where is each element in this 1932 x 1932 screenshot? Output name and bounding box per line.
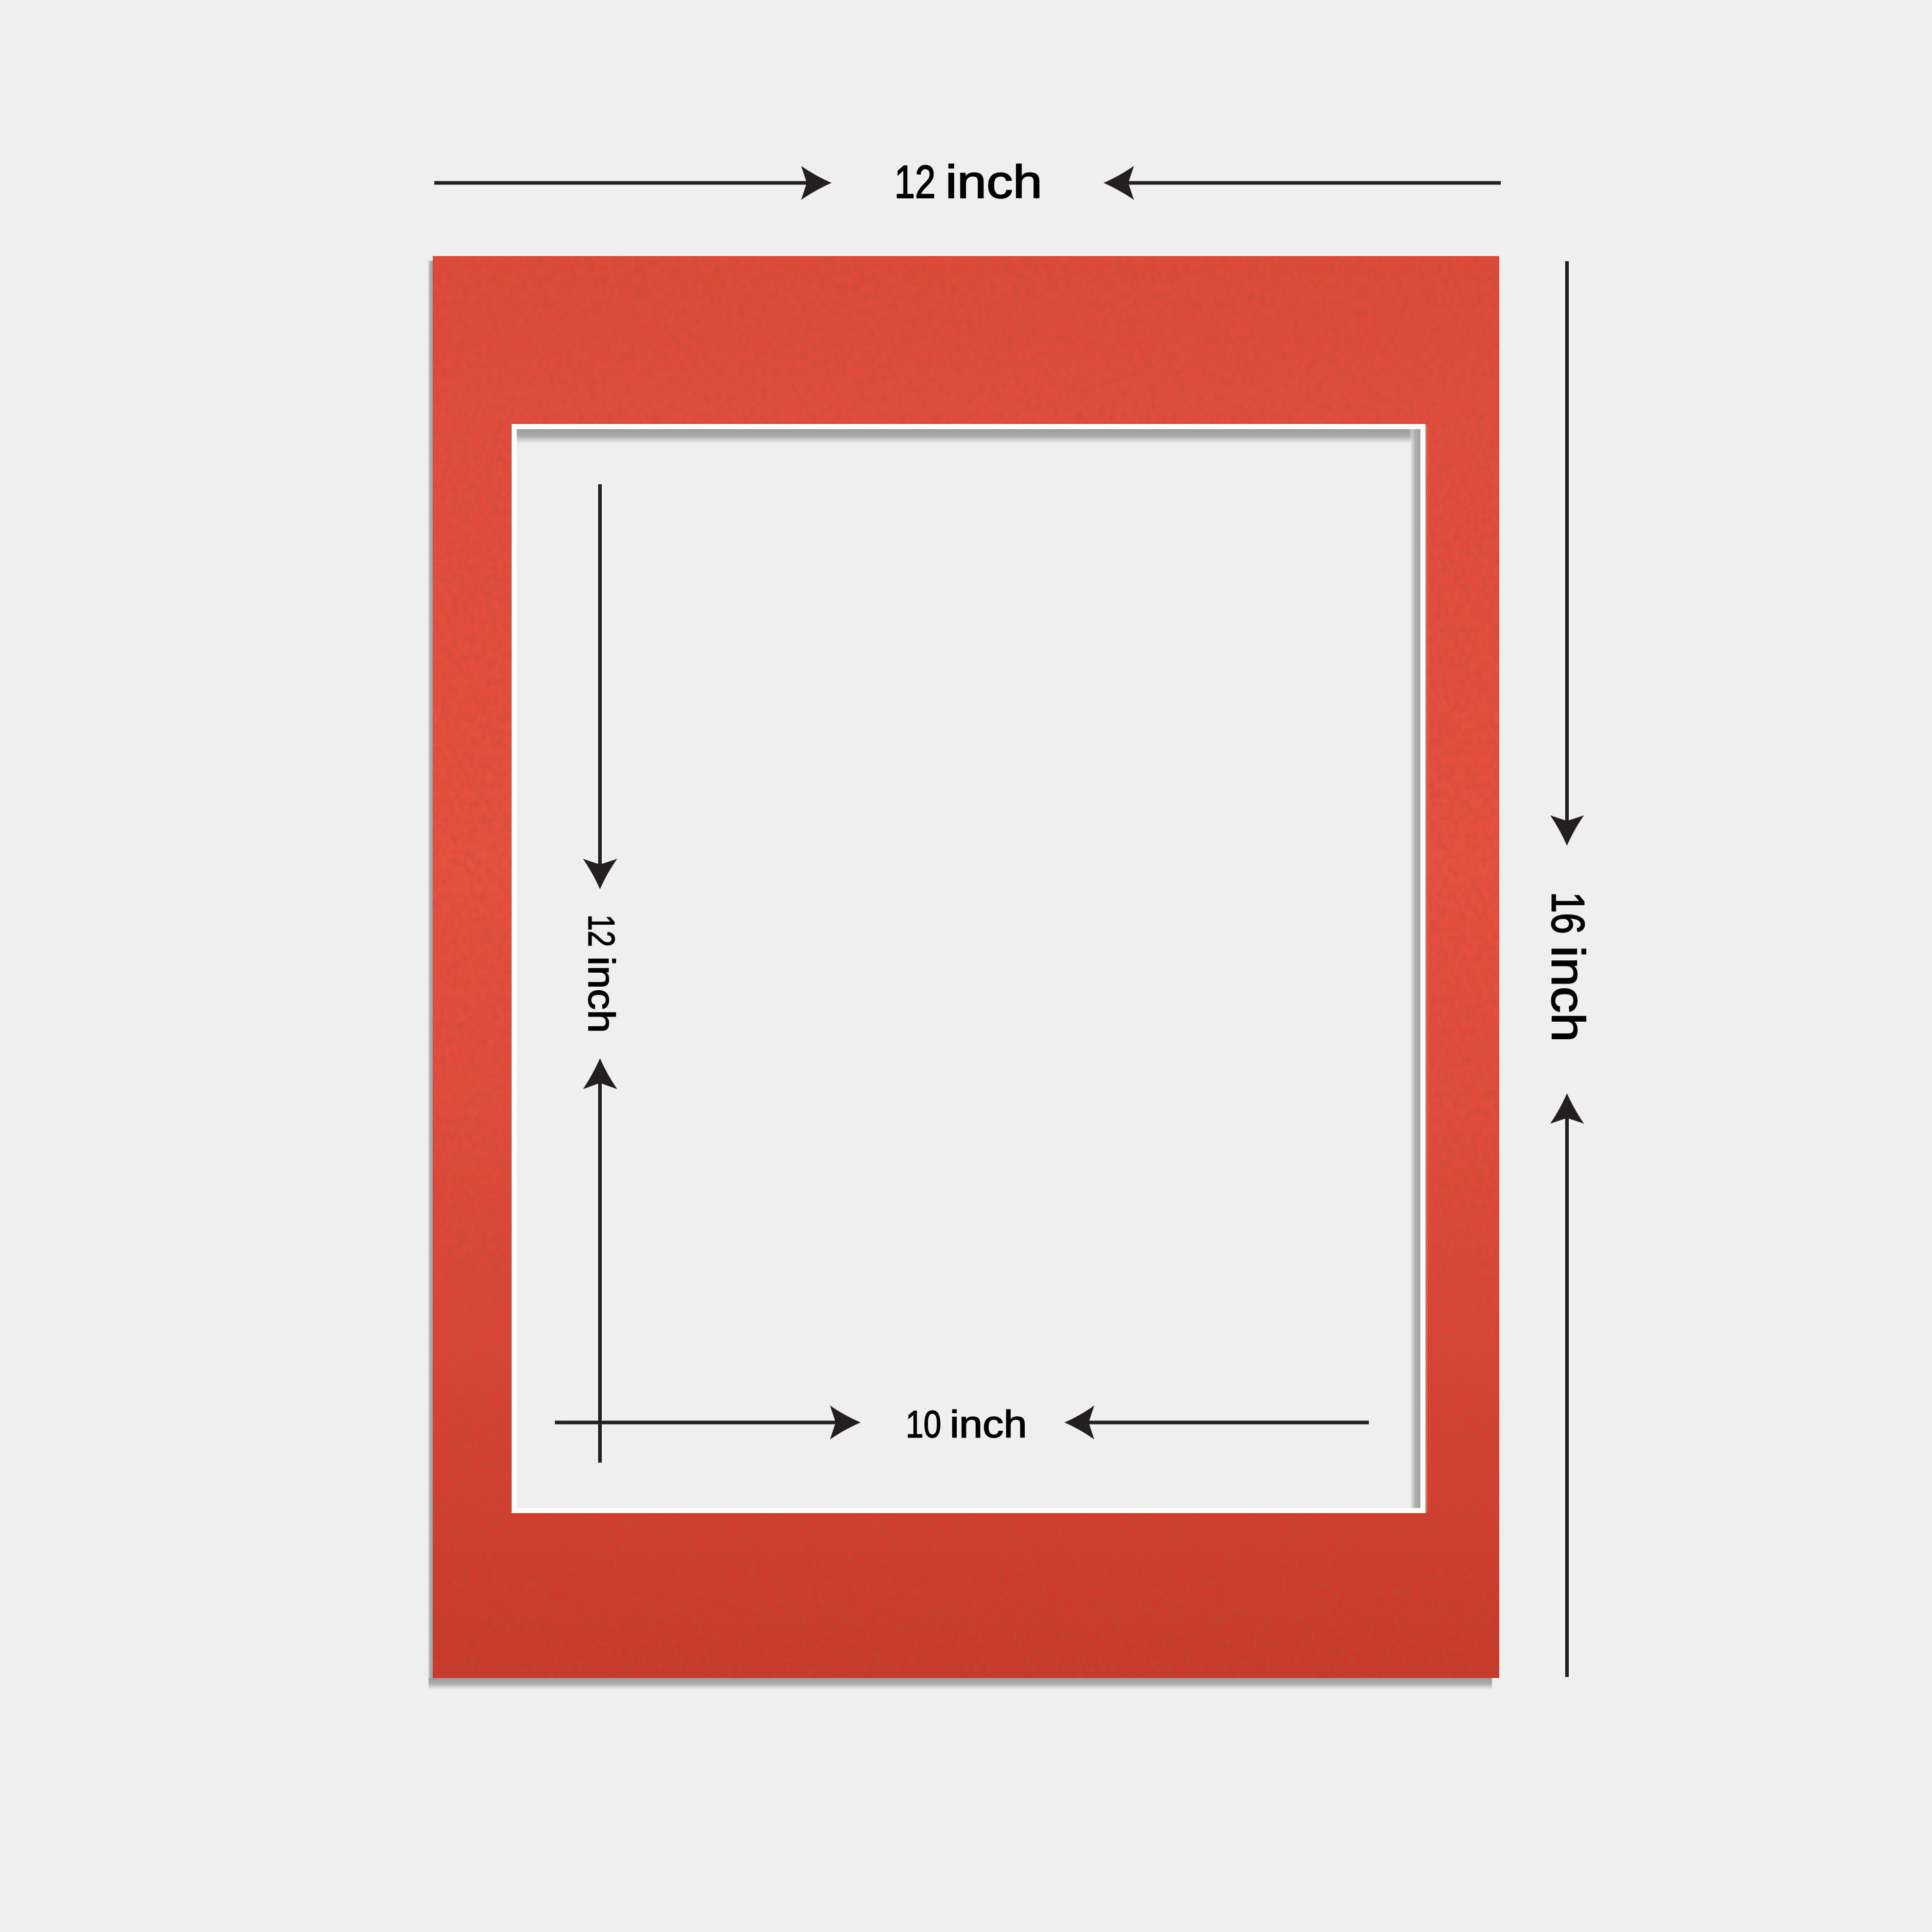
arrow: inner pointing right xyxy=(555,1405,860,1439)
dimension: inner height 12 inch xyxy=(581,484,622,1463)
panel: red mat board xyxy=(427,256,1499,1690)
window opening xyxy=(510,422,1428,1515)
mat surface xyxy=(433,256,1499,1678)
opening dark red cut edge xyxy=(510,422,1428,1515)
label: 12 inch top: inch xyxy=(945,157,1042,208)
arrow: inner pointing left xyxy=(1064,1405,1369,1439)
opening top inner shadow xyxy=(517,429,1420,445)
opening interior xyxy=(517,429,1420,1508)
arrow: top right pointing left xyxy=(1104,166,1501,200)
opening bevel white xyxy=(512,424,1426,1513)
arrow: right side pointing up xyxy=(1550,1093,1584,1677)
arrow: inner pointing down xyxy=(583,484,617,889)
label: 12 inch inner: 12 xyxy=(581,914,622,947)
label: 12 inch inner: inch xyxy=(581,956,622,1033)
dimension: top width 12 inch xyxy=(434,157,1501,208)
label: 12 inch top: 12 xyxy=(894,157,936,208)
mat bottom drop shadow xyxy=(429,1678,1492,1690)
arrow: top left pointing right xyxy=(434,166,832,200)
dimension: inner width 10 inch xyxy=(555,1403,1369,1446)
label: 10 inch inner: 10 xyxy=(906,1403,941,1446)
opening right inner shadow xyxy=(1409,429,1420,1508)
arrow: inner pointing up xyxy=(583,1058,617,1463)
label: 16 inch right: inch xyxy=(1541,946,1593,1042)
label: 10 inch inner: inch xyxy=(950,1403,1027,1446)
dimension: right height 16 inch xyxy=(1541,261,1593,1677)
arrow: right side pointing down xyxy=(1550,261,1584,846)
mat left drop shadow xyxy=(427,261,433,1684)
label: 16 inch right: 16 xyxy=(1541,892,1593,934)
